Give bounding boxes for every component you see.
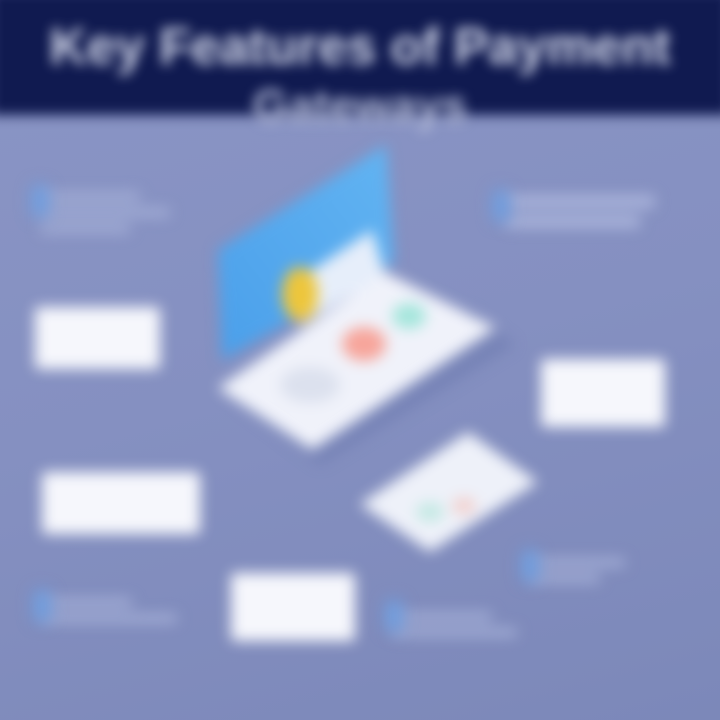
icon lower centre: [386, 600, 402, 632]
card 2: [541, 359, 665, 427]
icon top right: [493, 190, 509, 222]
icon lower right: [522, 550, 538, 582]
screen highlight: [290, 230, 385, 325]
device green accent: [416, 502, 444, 522]
card 1: [35, 307, 160, 369]
title: Gateways: [253, 80, 467, 132]
title: [43, 18, 677, 133]
caption top left: [41, 189, 168, 236]
caption lower left: [47, 594, 176, 628]
laptop base: [218, 272, 496, 450]
card 4: [231, 573, 355, 641]
yellow circle on screen: [282, 267, 318, 321]
grey key area: [280, 367, 340, 403]
card 3: [42, 472, 200, 534]
caption top right: [505, 190, 658, 233]
small device: [360, 432, 538, 552]
laptop shadow: [240, 310, 515, 465]
caption lower right: [534, 554, 625, 588]
title: Key Features of Payment: [49, 18, 671, 76]
header band: [0, 0, 720, 115]
green button: [392, 303, 426, 329]
red button: [342, 327, 386, 361]
caption lower centre: [395, 608, 517, 642]
icon top left: [32, 185, 48, 217]
device red accent: [452, 497, 476, 515]
icon lower left: [34, 590, 50, 622]
laptop screen: [218, 145, 394, 360]
